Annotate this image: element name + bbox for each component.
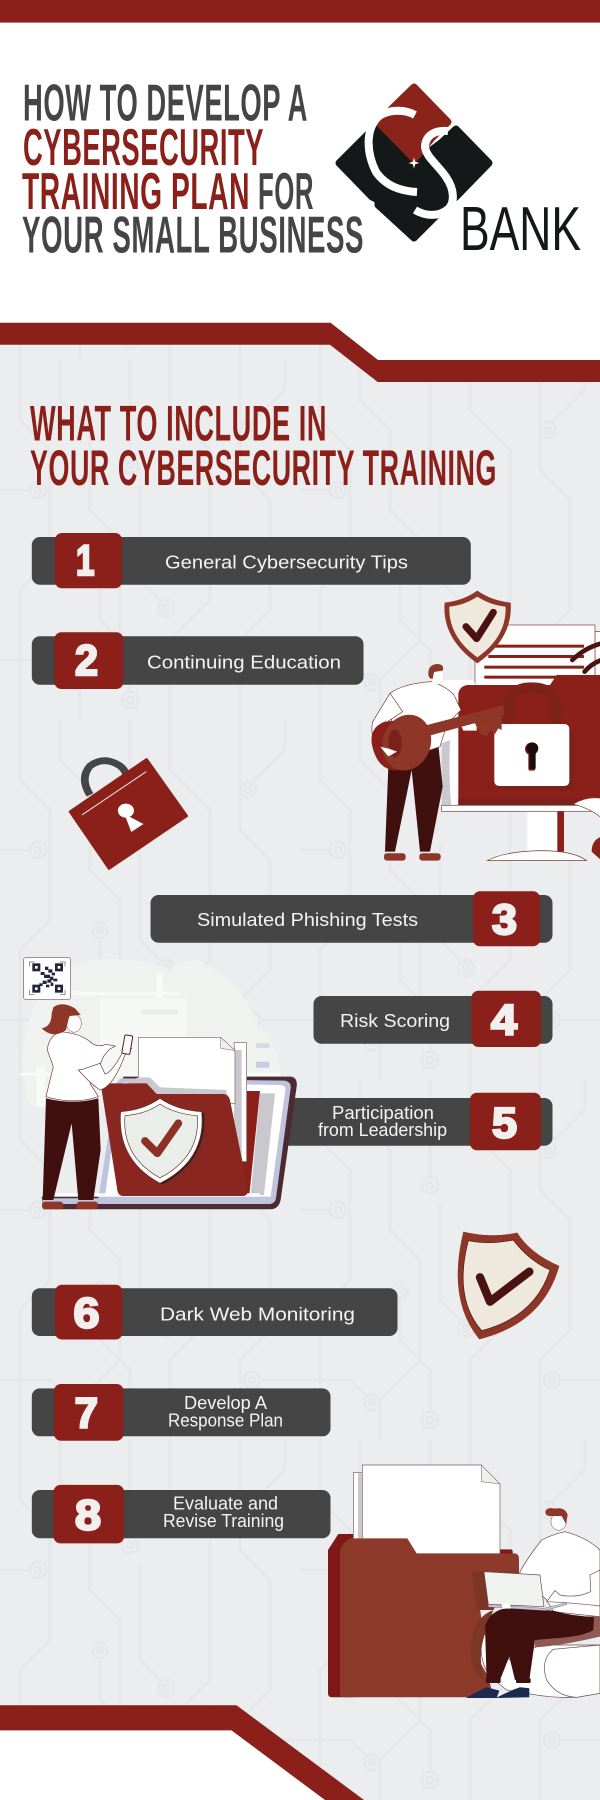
- chair back cushion: [544, 1645, 600, 1697]
- section divider band: [0, 323, 600, 382]
- bottom white panel: [0, 1730, 325, 1800]
- front page: [127, 1037, 235, 1103]
- woman legs: [43, 1098, 101, 1200]
- shield with check: [120, 1098, 207, 1187]
- key: [371, 705, 504, 777]
- logo black diamond: [339, 128, 489, 238]
- title: TRAINING PLAN: [22, 163, 250, 221]
- item 2: Continuing Education: 2: [75, 637, 98, 685]
- chair seat: [535, 1617, 600, 1647]
- item 4: Risk Scoring: [314, 991, 552, 1047]
- woman head and hair: [42, 1004, 81, 1034]
- item 2: Continuing Education: [32, 632, 364, 689]
- item 3: Simulated Phishing Tests: [150, 891, 552, 946]
- logo letter S: [415, 131, 453, 215]
- item 6: Dark Web Monitoring: [32, 1285, 398, 1340]
- illustration: man with key unlocking monitor: [371, 591, 600, 861]
- item 5: Participation from Leadership: [280, 1093, 552, 1150]
- item 1: General Cybersecurity Tips: 1: [76, 537, 94, 585]
- logo: CS Bank: [339, 87, 581, 264]
- item 6: Dark Web Monitoring: Dark Web Monitoring: [160, 1305, 355, 1325]
- monitor frame: [442, 680, 475, 811]
- item 7: Develop A Response Plan: [32, 1384, 331, 1441]
- title: FOR: [258, 163, 314, 221]
- man legs: [485, 1608, 594, 1680]
- back page: [234, 1043, 247, 1162]
- item 5: Participation from Leadership: Participation: [332, 1103, 434, 1123]
- cuffs: [486, 1678, 531, 1683]
- shield with check: [444, 591, 511, 663]
- item 6: Dark Web Monitoring: 6: [74, 1290, 100, 1338]
- item 8: Evaluate and Revise Training: Evaluate and: [173, 1493, 278, 1513]
- laptop: [42, 1077, 297, 1209]
- QR code: [24, 958, 71, 999]
- item 1: General Cybersecurity Tips: General Cybersecurity Tips: [165, 552, 408, 572]
- back folder: [328, 1534, 513, 1697]
- icon: tilted shield with check: [458, 1232, 559, 1339]
- item 3: Simulated Phishing Tests: 3: [492, 896, 517, 944]
- item 7: Develop A Response Plan: Response Plan: [168, 1411, 283, 1431]
- item 8: Evaluate and Revise Training: [32, 1485, 331, 1543]
- laptop: [484, 1572, 567, 1611]
- item 8: Evaluate and Revise Training: 8: [75, 1491, 101, 1539]
- item 8: Evaluate and Revise Training: Revise Training: [163, 1511, 284, 1531]
- man shoes: [384, 853, 441, 861]
- man torso: [520, 1532, 600, 1617]
- monitor stand: [487, 810, 587, 861]
- man arm: [547, 1570, 600, 1606]
- woman torso: [46, 1032, 115, 1101]
- item 7: Develop A Response Plan: 7: [75, 1389, 98, 1437]
- woman arm with phone: [78, 1035, 133, 1090]
- logo star spark: [408, 158, 420, 168]
- man head and hair: [545, 1508, 568, 1530]
- man arm: [372, 693, 403, 754]
- shoes: [466, 1687, 529, 1698]
- logo red diamond: [378, 87, 448, 159]
- item 1: General Cybersecurity Tips: [32, 533, 471, 588]
- chair white base and backdrop: [481, 1633, 600, 1697]
- item 4: Risk Scoring: 4: [491, 996, 517, 1044]
- folder: [102, 1083, 248, 1196]
- wifi arcs: [572, 643, 600, 672]
- man head and hair: [428, 664, 443, 684]
- bottom band: [0, 1705, 364, 1800]
- icon: tilted red padlock: [70, 759, 187, 869]
- padlock: [494, 687, 573, 790]
- section heading: [30, 396, 497, 496]
- item 5: Participation from Leadership: from Leadership: [318, 1120, 447, 1140]
- logo letter C: [369, 111, 417, 192]
- front page: [362, 1465, 500, 1555]
- section heading: WHAT TO INCLUDE IN: [30, 396, 327, 452]
- document behind folder: [475, 625, 600, 688]
- folder on monitor: [458, 675, 600, 805]
- man hand: [460, 723, 477, 731]
- person shadow on folder: [471, 1572, 517, 1687]
- pale blob background with building: [20, 959, 281, 1107]
- man legs: [385, 745, 443, 852]
- top bar: [0, 0, 600, 23]
- front folder: [340, 1538, 519, 1697]
- item 7: Develop A Response Plan: Develop A: [184, 1393, 267, 1413]
- item 3: Simulated Phishing Tests: Simulated Phishing Tests: [197, 910, 418, 930]
- title: CYBERSECURITY: [23, 119, 264, 177]
- item 5: Participation from Leadership: 5: [492, 1099, 517, 1147]
- item 4: Risk Scoring: Risk Scoring: [340, 1011, 450, 1031]
- illustration: woman with phone and laptop folder: [20, 958, 297, 1209]
- title: [22, 75, 364, 264]
- back page: [353, 1473, 363, 1541]
- title: HOW TO DEVELOP A: [23, 75, 308, 133]
- monitor right accent: [573, 798, 600, 818]
- item 2: Continuing Education: Continuing Education: [147, 652, 341, 672]
- man torso: [390, 682, 461, 757]
- woman shoes: [42, 1202, 98, 1209]
- illustration: man on chair with laptop and folder: [328, 1465, 600, 1698]
